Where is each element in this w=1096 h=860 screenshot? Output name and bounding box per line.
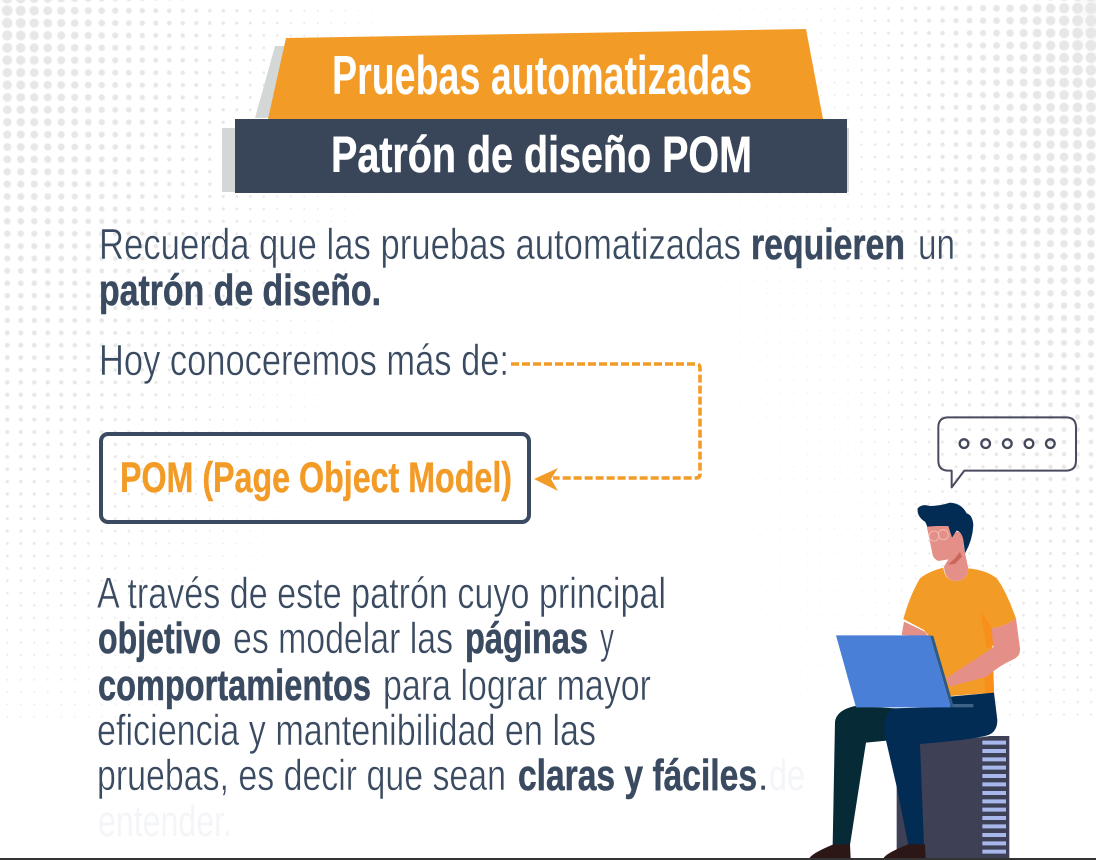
intro text block: Recuerda que las pruebas automatizadas [99, 220, 741, 269]
explanation paragraph: entender. [98, 797, 232, 846]
left arm behind laptop [902, 622, 928, 637]
neck [944, 550, 968, 581]
neck shadow [948, 552, 962, 565]
explanation paragraph: A través de este patrón cuyo principal [97, 569, 666, 618]
title text: Pruebas automatizadas [332, 44, 752, 106]
explanation paragraph: páginas [465, 614, 588, 663]
explanation paragraph: objetivo [98, 614, 221, 663]
lead-in text: Hoy conoceremos más de: [99, 336, 509, 385]
explanation paragraph: para lograr mayor [383, 661, 651, 710]
dashed arrow [511, 364, 700, 491]
shirt [903, 568, 1016, 696]
speech bubble [938, 417, 1076, 487]
POM callout box [101, 434, 529, 522]
right arm [946, 618, 1020, 687]
orange banner [268, 29, 823, 119]
subtitle banner [222, 119, 849, 193]
explanation paragraph: pruebas, es decir que sean [97, 751, 506, 800]
intro text block: patrón de diseño. [99, 266, 381, 315]
explanation paragraph: de [769, 751, 805, 800]
explanation paragraph: . [757, 751, 769, 800]
title banner [255, 29, 823, 119]
bottom border [0, 858, 1096, 860]
explanation paragraph: es modelar las [233, 614, 453, 663]
laptop [836, 635, 973, 707]
explanation paragraph [97, 569, 805, 846]
back leg [833, 706, 895, 845]
subtitle text: Patrón de diseño POM [331, 126, 752, 183]
banner back shadow [255, 46, 290, 118]
subtitle right shadow [846, 128, 849, 192]
illustration: person with laptop on server [809, 417, 1076, 858]
front leg [884, 693, 997, 845]
navy bar [235, 119, 847, 193]
intro text block: un [918, 220, 955, 269]
server tower [897, 736, 1009, 858]
explanation paragraph: comportamientos [98, 661, 371, 710]
glasses [929, 530, 948, 541]
shoes [809, 844, 926, 858]
explanation paragraph: y [600, 614, 614, 663]
explanation paragraph: eficiencia y mantenibilidad en las [97, 706, 596, 755]
shirt shadow upper [981, 610, 994, 649]
intro text block [99, 220, 955, 315]
shirt shadow lower [984, 670, 994, 694]
hair [918, 503, 973, 553]
subtitle left shadow [222, 128, 236, 192]
explanation paragraph: claras y fáciles [518, 751, 757, 800]
POM label: POM (Page Object Model) [120, 454, 512, 502]
intro text block: requieren [751, 220, 905, 269]
face [927, 525, 965, 561]
